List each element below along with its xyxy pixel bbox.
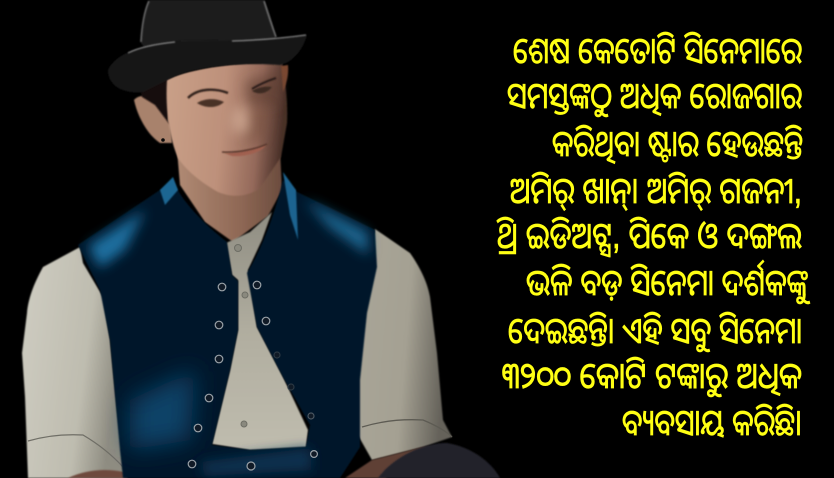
eye socket shadow	[245, 72, 280, 108]
shoulder highlight right	[305, 200, 368, 255]
shoulder highlight left	[88, 210, 145, 268]
far ear sliver	[281, 65, 288, 92]
left sleeve	[22, 247, 125, 478]
mouth	[224, 145, 266, 156]
lower left blue sheen	[130, 370, 195, 450]
face	[167, 62, 287, 196]
right sleeve	[355, 229, 452, 460]
right forearm	[345, 446, 440, 478]
nose shadow	[245, 105, 268, 140]
eyebrows	[188, 90, 228, 98]
neck	[177, 150, 282, 242]
waistcoat body	[78, 180, 377, 478]
shirt hem band	[200, 448, 312, 476]
hat brim highlights	[128, 35, 306, 53]
collar highlights	[160, 177, 178, 205]
right cuff line	[362, 420, 452, 437]
hat brim	[108, 35, 307, 92]
shirt buttons	[234, 244, 248, 427]
waistcoat	[78, 180, 377, 478]
earring	[161, 138, 165, 142]
shirt front	[212, 212, 308, 450]
left cuff line	[28, 435, 123, 467]
hat crown highlights	[141, 1, 276, 42]
left forearm	[68, 470, 128, 478]
hat crown	[141, 0, 276, 55]
dark knit fabric at knee	[378, 443, 500, 478]
text block: yellow Odia caption, right aligned	[496, 30, 810, 443]
photo: man in bowler hat and velvet waistcoat	[22, 0, 500, 478]
ear	[134, 96, 172, 143]
eyes	[197, 99, 224, 107]
hair	[140, 70, 170, 125]
waistcoat buttons	[188, 281, 317, 470]
nose highlight	[232, 105, 250, 132]
